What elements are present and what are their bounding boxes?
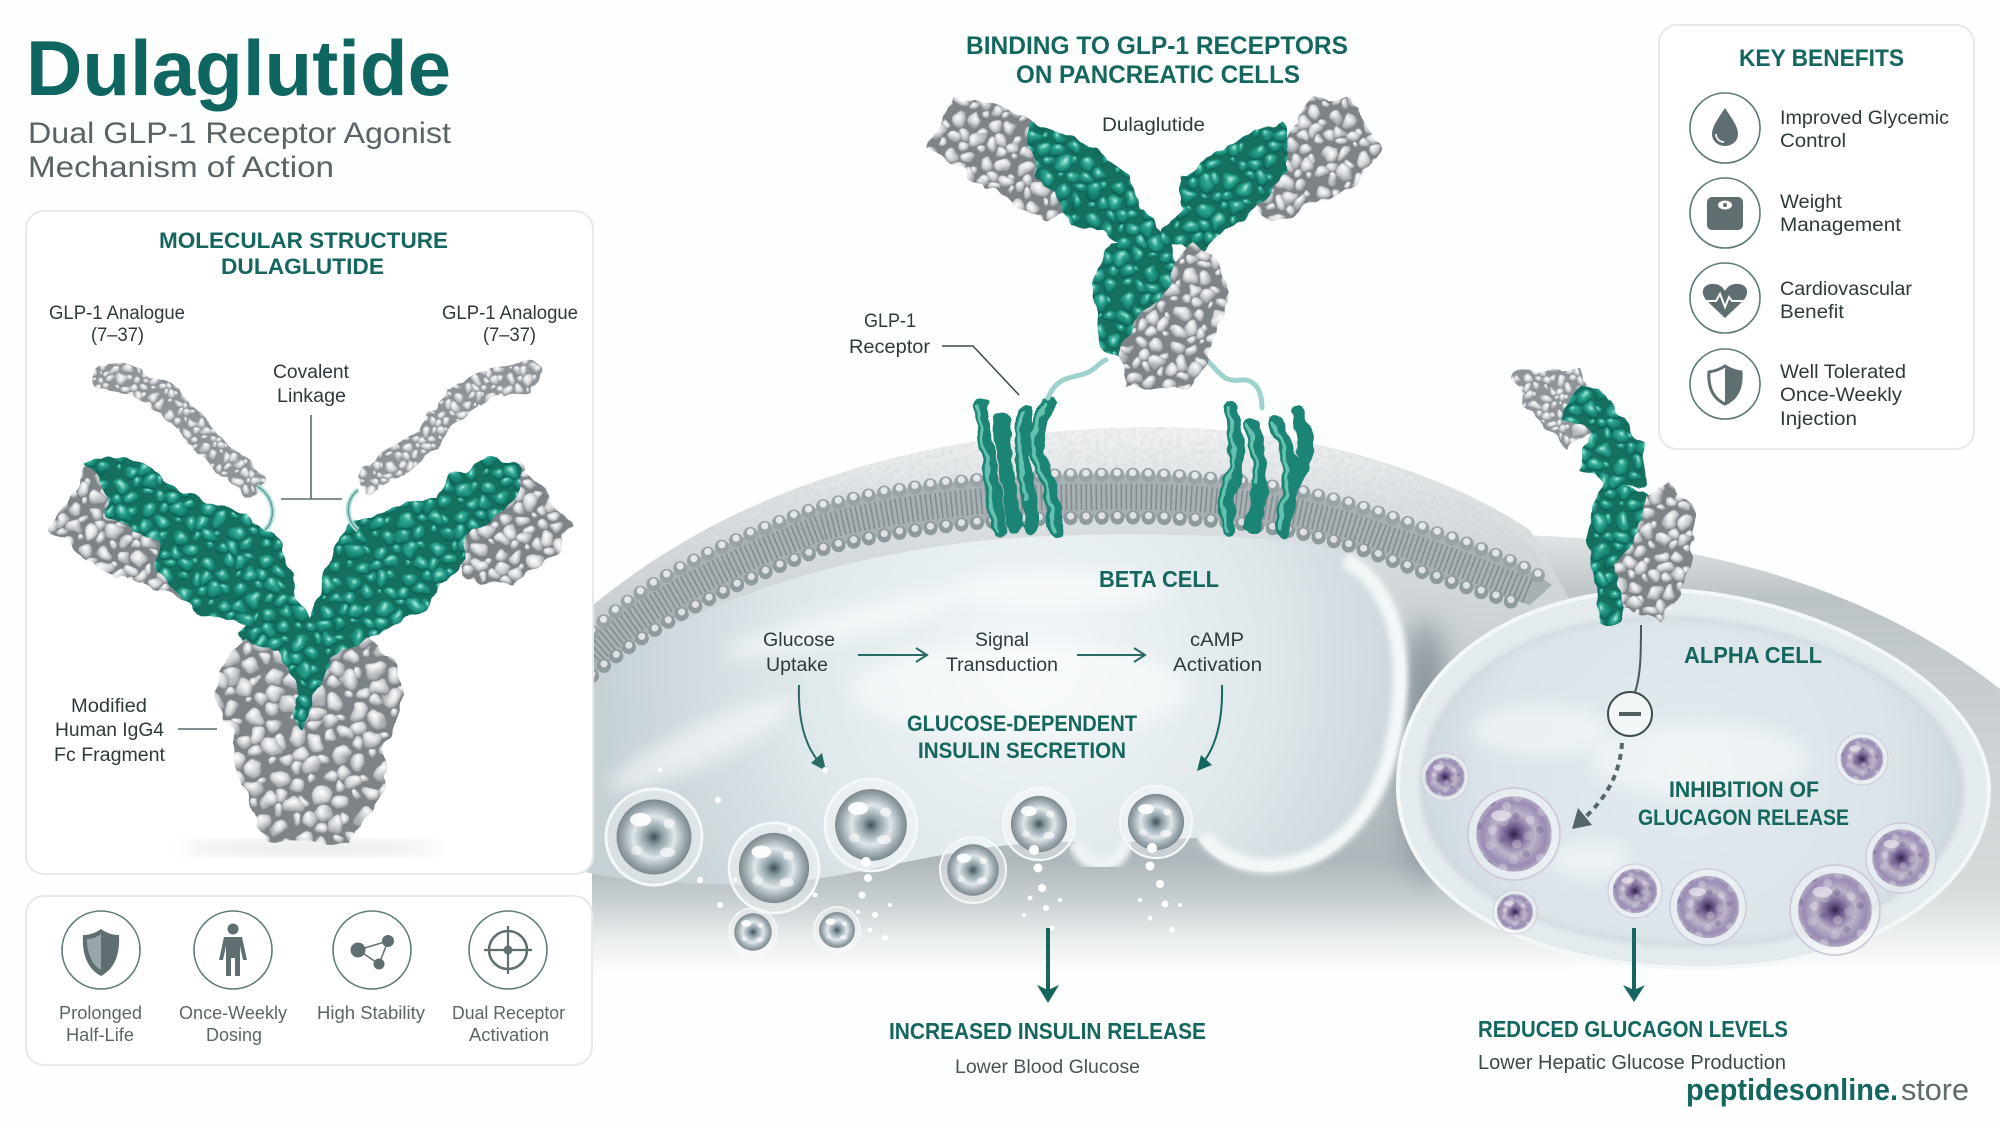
label: GLP-1 analogue left <box>49 303 185 346</box>
step: cAMP activation: cAMP <box>1190 630 1244 651</box>
panel: molecular structure <box>26 211 593 874</box>
benefit: cardiovascular: Benefit <box>1780 302 1845 323</box>
outcome: insulin: INCREASED INSULIN RELEASE <box>889 1018 1206 1044</box>
cell rim <box>1204 560 1400 866</box>
molecule: dulaglutide on alpha cell <box>1513 372 1693 620</box>
property: high stability: High Stability <box>317 1003 425 1023</box>
brand: store <box>1901 1072 1969 1107</box>
panel heading: DULAGLUTIDE <box>221 254 384 279</box>
gap shadow between cells <box>1399 620 1451 880</box>
label: GLP-1 receptor: GLP-1 <box>864 311 916 332</box>
benefit: cardiovascular: Cardiovascular <box>1780 279 1913 300</box>
property: prolonged half-life: Half-Life <box>66 1025 134 1045</box>
beta cell labels <box>763 566 1262 771</box>
key benefits heading: KEY BENEFITS <box>1739 45 1904 72</box>
receptors: GLP-1 receptor left and right <box>978 360 1306 532</box>
molecule: dulaglutide bound <box>931 100 1379 386</box>
benefit: glycemic control <box>1690 93 1949 163</box>
step: glucose uptake: Uptake <box>766 655 828 676</box>
benefit: well tolerated: Injection <box>1780 409 1857 430</box>
step: signal transduction: Transduction <box>946 655 1058 676</box>
heading: binding: ON PANCREATIC CELLS <box>1016 61 1300 89</box>
label: Fc fragment: Human IgG4 <box>55 720 164 741</box>
illustration: pancreatic cells <box>585 427 2000 985</box>
benefit: weight management <box>1690 178 1902 248</box>
property: once-weekly dosing <box>179 911 287 1045</box>
insulin secretion label: INSULIN SECRETION <box>918 738 1126 763</box>
property: prolonged half-life: Prolonged <box>59 1003 142 1023</box>
insulin vesicles <box>606 767 1192 956</box>
step: glucose uptake: Glucose <box>763 630 835 651</box>
water ripples <box>601 572 1190 805</box>
panel: key benefits <box>1659 25 1974 449</box>
dashed arrow <box>1572 743 1622 829</box>
curved arrow: right <box>1197 685 1222 771</box>
step: signal transduction <box>946 630 1058 676</box>
panel heading: MOLECULAR STRUCTURE <box>159 228 448 253</box>
arrow <box>1077 648 1145 662</box>
arrow: insulin release <box>1037 928 1059 1003</box>
benefit: well tolerated <box>1690 349 1906 430</box>
benefit: well tolerated: Well Tolerated <box>1780 362 1906 383</box>
inhibition label <box>1638 777 1849 830</box>
tethers to antibody <box>1048 360 1262 408</box>
property: dual receptor activation <box>452 911 565 1045</box>
benefit: glycemic control: Improved Glycemic <box>1780 108 1949 129</box>
label: GLP-1 analogue left: GLP-1 Analogue <box>49 303 185 324</box>
step: cAMP activation <box>1173 630 1262 676</box>
beta cell heading: BETA CELL <box>1099 566 1219 592</box>
subtitle: Dual GLP-1 Receptor Agonist <box>28 117 452 150</box>
property: dual receptor activation: Activation <box>469 1025 549 1045</box>
label: GLP-1 analogue right: (7–37) <box>483 325 536 346</box>
label: GLP-1 receptor <box>849 311 1019 395</box>
inhibition symbol <box>1608 625 1652 736</box>
arrow <box>858 648 927 662</box>
wavy membrane dip <box>1075 842 1126 864</box>
alpha cell labels <box>1572 625 1849 830</box>
label: covalent linkage: Linkage <box>277 386 346 407</box>
inhibition label: GLUCAGON RELEASE <box>1638 805 1849 830</box>
insulin secretion label: GLUCOSE-DEPENDENT <box>907 711 1138 736</box>
panel heading <box>159 228 448 279</box>
outcome: insulin <box>889 1018 1206 1078</box>
property: high stability <box>317 911 425 1023</box>
label: GLP-1 receptor: Receptor <box>849 337 931 358</box>
outcome: glucagon: Lower Hepatic Glucose Production <box>1478 1052 1786 1074</box>
molecule: dulaglutide structure <box>55 376 567 854</box>
subtitle <box>28 117 452 184</box>
benefit: well tolerated: Once-Weekly <box>1780 385 1903 406</box>
outcome: glucagon: REDUCED GLUCAGON LEVELS <box>1478 1016 1788 1042</box>
label: GLP-1 analogue right <box>442 303 578 346</box>
label: covalent linkage: Covalent <box>273 362 350 383</box>
heading: binding <box>966 32 1348 89</box>
label: Fc fragment: Fc Fragment <box>54 745 166 766</box>
property: prolonged half-life <box>59 911 142 1045</box>
insulin secretion label <box>907 711 1138 763</box>
heading: binding: BINDING TO GLP-1 RECEPTORS <box>966 32 1348 60</box>
textured top surface of the beta cell <box>592 427 1556 632</box>
benefit: weight management: Management <box>1780 215 1902 236</box>
label: covalent linkage <box>273 362 350 499</box>
cell surface: alpha side hill <box>1380 535 2000 985</box>
property: once-weekly dosing: Once-Weekly <box>179 1003 287 1023</box>
inhibition label: INHIBITION OF <box>1669 777 1819 802</box>
peptide arms <box>104 376 250 482</box>
benefit: cardiovascular <box>1690 263 1913 333</box>
insulin sparkles <box>658 767 1182 941</box>
arrow: glucagon reduction <box>1623 928 1645 1002</box>
label: dulaglutide: Dulaglutide <box>1102 115 1205 136</box>
bilayer membrane <box>592 473 1552 676</box>
subtitle: Mechanism of Action <box>28 151 334 184</box>
label: Fc fragment: Modified <box>71 696 147 717</box>
label: Fc fragment <box>54 696 217 766</box>
panel: properties <box>26 896 592 1065</box>
heading: title <box>26 24 452 184</box>
outcome: glucagon <box>1478 1016 1788 1074</box>
label: GLP-1 analogue right: GLP-1 Analogue <box>442 303 578 324</box>
alpha cell heading: ALPHA CELL <box>1684 642 1822 668</box>
label: GLP-1 analogue left: (7–37) <box>91 325 144 346</box>
cell surface: beta body <box>592 427 1570 985</box>
title: Dulaglutide <box>26 24 451 112</box>
outcome: insulin: Lower Blood Glucose <box>955 1057 1140 1078</box>
property: once-weekly dosing: Dosing <box>206 1025 262 1045</box>
step: cAMP activation: Activation <box>1173 655 1262 676</box>
beta cell interior <box>585 534 1405 885</box>
benefit: glycemic control: Control <box>1780 131 1846 152</box>
glucagon vesicles <box>1421 733 1936 955</box>
alpha cell <box>1398 590 1989 968</box>
brand: peptidesonline. <box>1686 1072 1898 1107</box>
curved arrow: left <box>799 685 826 771</box>
step: signal transduction: Signal <box>975 630 1029 651</box>
property: dual receptor activation: Dual Receptor <box>452 1003 565 1023</box>
step: glucose uptake <box>763 630 835 676</box>
benefit: weight management: Weight <box>1780 192 1843 213</box>
